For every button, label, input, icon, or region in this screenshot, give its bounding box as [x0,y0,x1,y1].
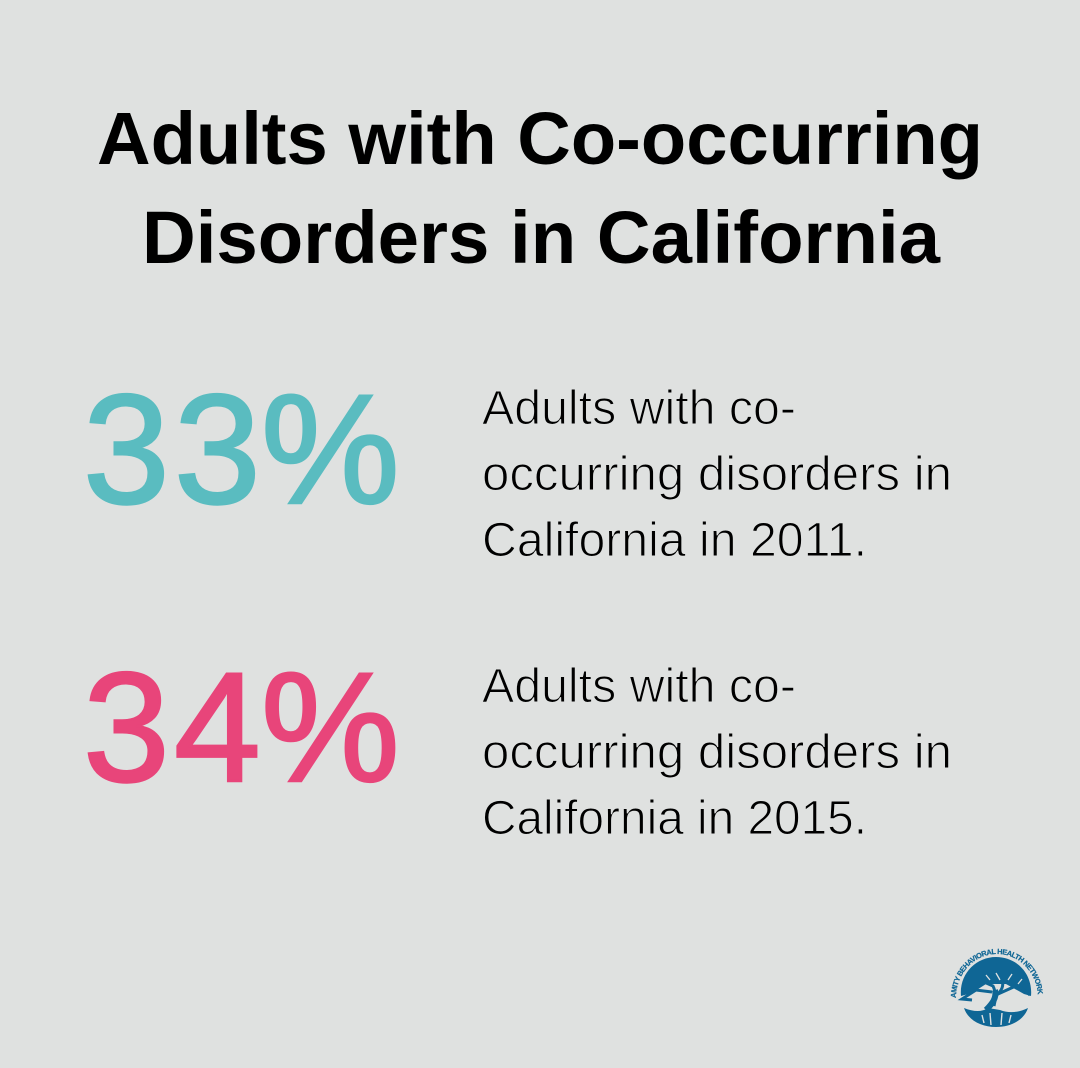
logo canopy [961,957,1031,996]
description: 2015: Adults with co- [482,660,796,713]
description: 2015: occurring disorders in [482,726,952,779]
logo ring text: AMITY BEHAVIORAL HEALTH NETWORK [950,948,1044,998]
logo branch highlights [986,973,1022,984]
stat: 34 percent: 34% [83,641,400,815]
logo branches [962,980,1030,1006]
title: Adults with Co-occurring [97,97,983,180]
stat: 33 percent: 33% [83,363,400,537]
description: 2011: Adults with co- [482,382,796,435]
description: 2015 [482,660,952,845]
logo trunk [986,990,995,1010]
logo roots bowl [964,1008,1028,1027]
logo root lines [982,1013,1011,1025]
description: 2011: California in 2011. [482,514,867,567]
title [97,97,983,279]
description: 2011: occurring disorders in [482,448,952,501]
description: 2015: California in 2015. [482,792,867,845]
logo: Amity Behavioral Health Network tree [950,948,1044,1027]
title: Disorders in California [142,196,941,279]
description: 2011 [482,382,952,567]
